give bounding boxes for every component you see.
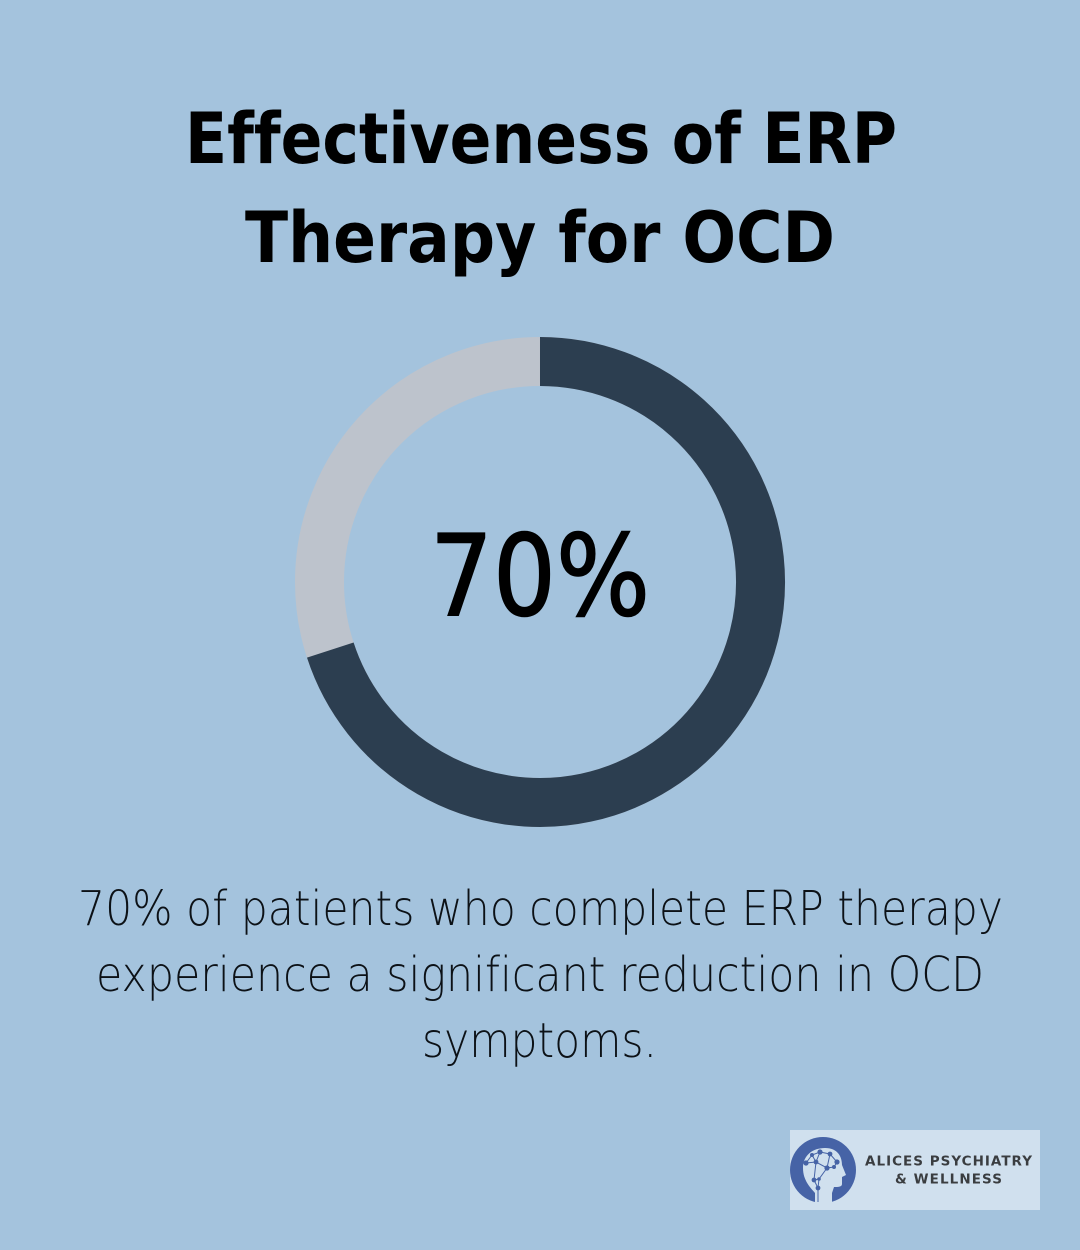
- title: Effectiveness of ERP: [185, 98, 897, 180]
- title: Therapy for OCD: [245, 197, 835, 279]
- logo badge: [790, 1130, 1040, 1210]
- description text: symptoms.: [422, 1013, 657, 1069]
- donut chart: 70 percent: [320, 362, 761, 802]
- icon: head with brain network: [790, 1137, 856, 1203]
- description text: experience a significant reduction in OCD: [96, 947, 984, 1003]
- title: [185, 98, 897, 279]
- logo wordmark: & WELLNESS: [895, 1172, 1002, 1188]
- logo wordmark: ALICES PSYCHIATRY: [865, 1154, 1032, 1170]
- logo wordmark: [865, 1154, 1032, 1188]
- donut centre value: 70%: [430, 512, 650, 642]
- description text: [78, 881, 1003, 1069]
